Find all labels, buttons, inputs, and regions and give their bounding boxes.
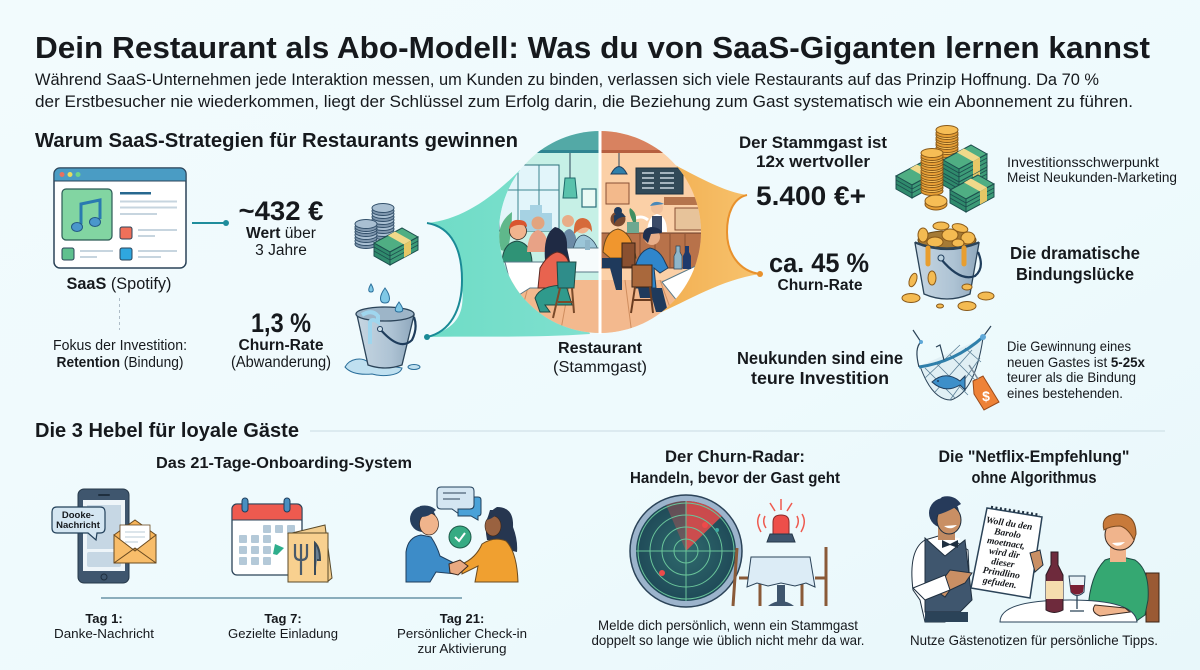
person: woman in orange: [602, 207, 636, 290]
intro text: Während SaaS-Unternehmen jede Interaktion messen, um Kunden zu binden, verlassen sich viele Restaurants auf das Prinzip Hoffnung. Da 70 %: [35, 70, 1099, 89]
text: retention gap: [1010, 243, 1140, 284]
heading: regular guest value: Der Stammgast ist: [739, 133, 887, 152]
label: investment focus: Retention (Bindung): [56, 355, 184, 371]
notepad with handwriting: Woll du den: [985, 516, 1033, 533]
heading: Netflix recommendation: ohne Algorithmus: [972, 469, 1096, 487]
icon: alarm siren: [758, 499, 804, 542]
stat: SaaS churn rate: Churn-Rate: [238, 337, 324, 354]
heading: churn radar: Handeln, bevor der Gast geht: [630, 470, 840, 487]
intro text: [35, 70, 1133, 111]
text: reach out: doppelt so lange wie üblich nicht mehr da war.: [592, 632, 864, 648]
label: investment focus: Fokus der Investition:: [53, 338, 187, 354]
illustration: restaurant scene: [499, 131, 702, 335]
panel: central restaurant funnel: [424, 131, 763, 376]
text: new customers are costly: teure Investition: [751, 368, 889, 388]
panel: restaurant stats column: [737, 126, 1177, 410]
text: acquisition cost: [1007, 339, 1145, 401]
icon: empty table with chairs: [733, 547, 826, 606]
text: investment focus: [1007, 155, 1177, 185]
text: new customers are costly: Neukunden sind eine: [737, 348, 903, 368]
stat: value over 3 years: [238, 196, 324, 259]
connector: SaaS to value: [192, 220, 229, 226]
label: Restaurant (Stammgast): [553, 340, 647, 376]
stat: restaurant churn rate: Churn-Rate: [778, 277, 863, 294]
icon: handshake people: [406, 487, 518, 582]
text: acquisition cost: teurer als die Bindung: [1007, 370, 1136, 385]
stat: restaurant churn rate: [769, 248, 869, 294]
heading: regular guest value: [739, 133, 887, 171]
icon: fishing net with price tag: $: [982, 388, 990, 404]
notepad with handwriting: Prindlino: [982, 566, 1021, 582]
panel: SaaS comparison column: [53, 168, 420, 376]
stat: value over 3 years: ~432 €: [238, 196, 324, 226]
person: background diners: [527, 215, 598, 252]
funnel: teal SaaS side: [424, 170, 590, 340]
stat: value over 3 years: Wert über: [246, 225, 316, 242]
icon: phone with message and envelope: Dooke-: [62, 510, 94, 521]
stat: value over 3 years: 3 Jahre: [255, 242, 307, 259]
intro text: der Erstbesucher nie wiederkommen, liegt der Schlüssel zum Erfolg darin, die Beziehung zum Gast systematisch wie ein Abonnement zu führen.: [35, 92, 1133, 111]
person: man in blue: [631, 227, 668, 313]
notepad with handwriting: moetnact,: [986, 536, 1026, 552]
step: day 21: Tag 21:: [440, 611, 484, 626]
heading: why SaaS strategies win: Warum SaaS-Strategien für Restaurants gewinnen: [35, 129, 518, 152]
text: retention gap: Die dramatische: [1010, 243, 1140, 263]
step: day 21: Persönlicher Check-in: [397, 626, 527, 641]
text: acquisition cost: eines bestehenden.: [1007, 386, 1123, 401]
step: day 21: zur Aktivierung: [418, 641, 506, 656]
stat: guest value: 5.400 €+: [756, 181, 866, 211]
tables with white cloths: [505, 240, 700, 302]
icon: coins and cash: [355, 204, 418, 265]
label: Restaurant (Stammgast): Restaurant: [558, 340, 643, 357]
icon: fishing net with price tag: [913, 326, 999, 410]
funnel: orange restaurant side: [655, 165, 763, 315]
text: acquisition cost: Die Gewinnung eines: [1007, 339, 1131, 354]
step: day 1: [54, 611, 154, 641]
step: day 21: [397, 611, 527, 656]
notepad with handwriting: wird dir: [988, 547, 1021, 561]
illustration: guest at table with wine: [1000, 514, 1159, 622]
illustration: waiter: [912, 496, 972, 622]
icon: phone with message and envelope: [52, 489, 156, 583]
text: investment focus: Meist Neukunden-Marketing: [1007, 170, 1177, 185]
notepad with handwriting: gefuden.: [981, 576, 1017, 591]
step: day 7: Gezielte Einladung: [228, 626, 338, 641]
heading: Netflix recommendation: Die "Netflix-Empfehlung": [938, 448, 1130, 466]
person: man in green: [502, 220, 532, 262]
label: Restaurant (Stammgast): (Stammgast): [553, 359, 647, 376]
label: SaaS (Spotify): SaaS (Spotify): [66, 275, 172, 293]
panel: 21-day onboarding: [52, 455, 527, 656]
text: reach out: Melde dich persönlich, wenn ein Stammgast: [598, 617, 858, 633]
heading: regular guest value: 12x wertvoller: [756, 152, 870, 171]
step: day 7: Tag 7:: [264, 611, 302, 626]
icon: leaking bucket: [345, 284, 420, 376]
panel: churn radar: [592, 448, 864, 648]
stat: SaaS churn rate: 1,3 %: [251, 308, 311, 338]
icon: calendar and menu: [232, 498, 332, 582]
text: guest notes: Nutze Gästenotizen für persönliche Tipps.: [910, 632, 1158, 648]
wine bottles: [674, 246, 691, 269]
timeline line: [101, 597, 462, 599]
heading: churn radar: Der Churn-Radar:: [665, 448, 805, 466]
label: investment focus: [53, 338, 187, 371]
notepad with handwriting: [971, 507, 1043, 598]
notepad with handwriting: dieser: [991, 557, 1015, 571]
text: acquisition cost: neuen Gastes ist 5-25x: [1007, 355, 1145, 370]
heading: churn radar: [630, 448, 840, 487]
notepad with handwriting: Barolo: [992, 527, 1022, 541]
icon: phone with message and envelope: Nachricht: [56, 520, 101, 531]
person: woman seen from behind: [535, 227, 576, 318]
step: day 7: [228, 611, 338, 641]
text: investment focus: Investitionsschwerpunkt: [1007, 155, 1159, 170]
person: bartender: [627, 202, 667, 233]
panel: Netflix recommendation: [910, 448, 1159, 648]
icon: music app window: [54, 168, 186, 268]
text: new customers are costly: [737, 348, 903, 388]
icon: radar: [630, 495, 742, 607]
heading: three levers: Die 3 Hebel für loyale Gäste: [35, 420, 299, 442]
stat: restaurant churn rate: ca. 45 %: [769, 248, 869, 278]
step: day 1: Danke-Nachricht: [54, 626, 154, 641]
heading: Netflix recommendation: [938, 448, 1130, 487]
step: day 1: Tag 1:: [85, 611, 123, 626]
title: Dein Restaurant als Abo-Modell: Was du von SaaS-Giganten lernen kannst: [35, 30, 1150, 65]
text: reach out: [592, 617, 864, 648]
icon: money and coin stacks: [896, 126, 994, 212]
stat: SaaS churn rate: [231, 308, 331, 371]
stat: SaaS churn rate: (Abwanderung): [231, 354, 331, 371]
heading: onboarding system: Das 21-Tage-Onboarding-System: [156, 455, 412, 472]
text: retention gap: Bindungslücke: [1016, 264, 1134, 284]
icon: bucket leaking coins: [902, 222, 994, 310]
